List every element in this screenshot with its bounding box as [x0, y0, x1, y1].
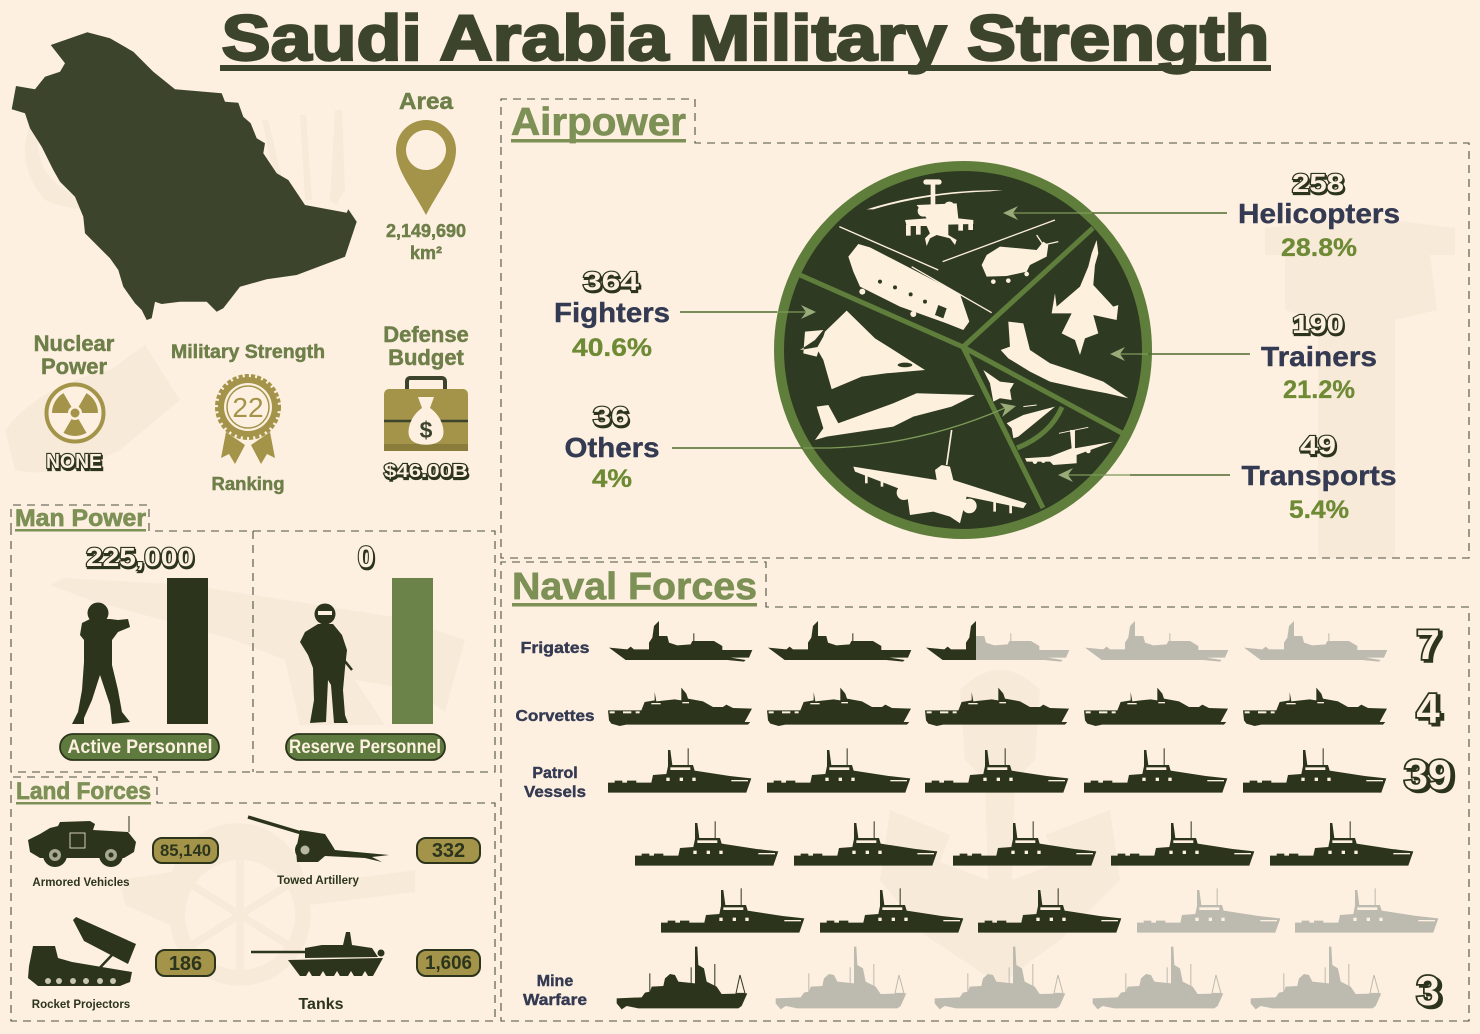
pointer: others — [672, 403, 1016, 448]
row: patrol vessels: Vessels — [524, 784, 586, 801]
pill: reserve personnel: Reserve Personnel — [289, 737, 441, 758]
icon: ranking medal — [218, 377, 278, 464]
label: helicopters: 258 — [1292, 168, 1344, 198]
label: helicopters: Helicopters — [1238, 198, 1400, 229]
label: others: 4% — [592, 465, 632, 493]
icon: radiation symbol — [46, 384, 104, 442]
row: frigates: 7 — [1416, 621, 1440, 668]
value: towed artillery — [417, 838, 480, 863]
pointer: fighters — [680, 305, 816, 319]
defense budget stat: $46.00B — [384, 461, 468, 481]
heading: land forces: Land Forces — [16, 778, 151, 805]
pointer: transports — [1058, 468, 1230, 482]
panel: airpower — [501, 99, 1469, 558]
row: frigates — [521, 621, 1443, 663]
military strength stat: Ranking — [212, 474, 284, 494]
active personnel value: 225,000 — [86, 542, 194, 572]
label: helicopters — [1238, 168, 1400, 262]
value: tanks — [417, 950, 480, 976]
label: helicopters: 28.8% — [1281, 234, 1357, 262]
label: fighters: 364 — [583, 266, 640, 296]
row: mine warfare: Warfare — [523, 992, 587, 1009]
row: corvettes — [516, 685, 1440, 732]
label: trainers — [1261, 309, 1377, 404]
area stat: km² — [410, 243, 442, 263]
aircraft silhouettes — [800, 179, 1128, 523]
icon: location pin — [396, 120, 456, 215]
area stat: Area — [399, 88, 453, 114]
row: frigates: Frigates — [520, 640, 590, 657]
defense budget stat — [383, 322, 469, 481]
icon: ranking medal: 22 — [232, 392, 264, 423]
nuclear power stat: Nuclear — [34, 331, 115, 356]
icon: briefcase with money bag — [384, 378, 468, 451]
label: rocket projectors: Rocket Projectors — [32, 999, 130, 1011]
row: corvettes: Corvettes — [516, 708, 595, 725]
area stat — [386, 88, 466, 263]
row: patrol vessels: Patrol — [532, 765, 578, 782]
value: armored vehicles: 85,140 — [160, 841, 211, 860]
label: transports — [1242, 430, 1396, 524]
bar: active — [167, 578, 208, 724]
pointer: trainers — [1110, 347, 1250, 361]
defense budget stat: Defense — [383, 322, 469, 347]
label: trainers: 21.2% — [1283, 376, 1355, 404]
row: mine warfare: 3 — [1416, 967, 1440, 1014]
value: towed artillery: 332 — [432, 840, 465, 862]
label: transports: 49 — [1300, 430, 1336, 460]
pie dividers — [800, 228, 1122, 508]
military strength stat: Military Strength — [171, 342, 325, 363]
row: patrol vessels — [524, 748, 1452, 933]
icon: armored vehicle — [28, 816, 136, 867]
value: armored vehicles — [153, 838, 218, 863]
value: tanks: 1,606 — [425, 953, 472, 974]
heading: naval forces: Naval Forces — [512, 566, 757, 608]
label: trainers: Trainers — [1261, 341, 1377, 372]
label: armored vehicles: Armored Vehicles — [32, 877, 130, 889]
row: corvettes: 4 — [1416, 685, 1440, 732]
map: Saudi Arabia — [12, 32, 357, 320]
panel: land forces — [11, 777, 495, 1021]
label: fighters: 40.6% — [572, 334, 652, 362]
nuclear power stat: NONE — [46, 451, 102, 473]
icon: tank — [251, 932, 384, 976]
pill: active personnel: Active Personnel — [68, 737, 212, 758]
label: transports: 5.4% — [1289, 496, 1349, 524]
label: fighters — [554, 266, 670, 362]
label: tanks: Tanks — [298, 996, 344, 1013]
nuclear power stat — [34, 331, 115, 473]
label: others: 36 — [593, 401, 629, 431]
row: mine warfare: Mine — [537, 973, 573, 990]
label: others: Others — [564, 432, 660, 463]
row: patrol vessels: 39 — [1404, 751, 1452, 798]
label: towed artillery: Towed Artillery — [277, 875, 359, 887]
reserve personnel value: 0 — [358, 541, 374, 574]
icon: rocket projector — [28, 917, 136, 986]
panel: man power — [11, 505, 495, 772]
pointer: helicopters — [1003, 206, 1227, 220]
label: others — [564, 401, 660, 493]
label: fighters: Fighters — [554, 297, 670, 328]
heading: airpower: Airpower — [511, 101, 686, 144]
label: trainers: 190 — [1292, 309, 1344, 339]
heading: man power: Man Power — [15, 505, 146, 532]
bar: reserve — [392, 578, 433, 724]
value: rocket projectors — [156, 950, 215, 976]
label: transports: Transports — [1242, 460, 1396, 491]
pie chart: aircraft types — [779, 166, 1147, 534]
row: mine warfare — [523, 947, 1440, 1014]
defense budget stat: Budget — [388, 345, 465, 370]
icon: towed artillery — [248, 817, 389, 862]
area stat: 2,149,690 — [386, 221, 466, 241]
panel: naval forces — [501, 562, 1469, 1021]
title: Saudi Arabia Military Strength — [222, 2, 1270, 74]
icon: briefcase with money bag: $ — [420, 417, 433, 443]
icon: soldier aiming rifle — [72, 602, 130, 724]
icon: soldier holding rifle — [300, 604, 352, 723]
value: rocket projectors: 186 — [169, 953, 202, 975]
military strength stat — [171, 342, 325, 494]
nuclear power stat: Power — [41, 354, 107, 379]
